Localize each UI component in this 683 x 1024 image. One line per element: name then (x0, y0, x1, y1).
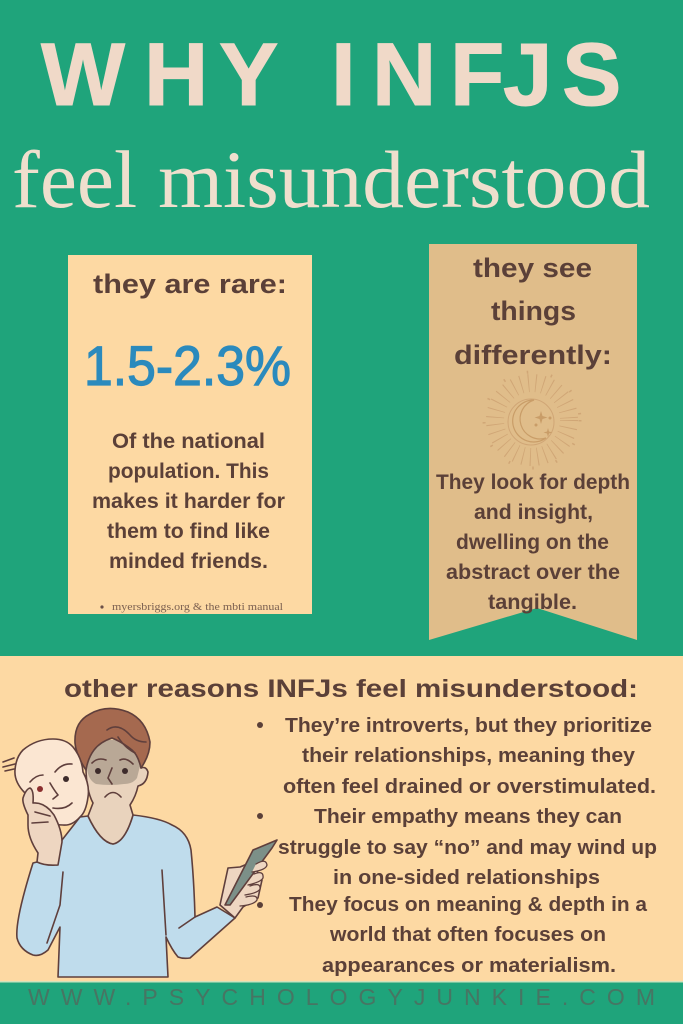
hand holding mask (23, 788, 62, 865)
text block: national population: population. This (108, 460, 269, 483)
title: WHY INFJS: Y (219, 24, 277, 124)
title: WHY INFJS: F (450, 24, 504, 124)
reason list: appearances or materialism. (322, 955, 616, 977)
reason list: They focus on meaning & depth in a (289, 894, 648, 916)
reason list: in one-sided relationships (333, 867, 600, 889)
illustration: man holding a smiling mask and phone (3, 708, 277, 977)
head and hair (75, 708, 150, 844)
phone and hand (220, 840, 277, 918)
source note: myersbriggs.org & the mbti manual (112, 602, 283, 613)
panel: other reasons (0, 656, 683, 982)
title: WHY INFJS: N (372, 24, 436, 124)
text block: national population: minded friends. (109, 550, 268, 573)
reason list: Their empathy means they can (314, 806, 622, 828)
title: WHY INFJS: S (562, 24, 621, 124)
text block: depth and insight: dwelling on the (456, 531, 609, 554)
heading: they see things differently: things (491, 296, 576, 326)
footer strip with website (0, 981, 683, 1024)
website address: WWW.PSYCHOLOGYJUNKIE.COM (28, 984, 655, 1010)
panel: they are rare (68, 255, 312, 614)
mask (3, 739, 88, 825)
heading: they see things differently (454, 253, 612, 370)
reason list (257, 715, 657, 977)
reason list: They’re introverts, but they prioritize (285, 715, 652, 737)
heading: they see things differently: they see (473, 253, 592, 283)
heading: they are rare: they are rare: (93, 269, 287, 299)
text block: national population: them to find like (107, 520, 270, 543)
heading: they see things differently: differently: (454, 340, 612, 370)
text block: national population: makes it harder for (92, 490, 285, 513)
text block: national population (92, 430, 285, 573)
shirt and arms (17, 815, 235, 977)
reason list: often feel drained or overstimulated. (283, 776, 656, 798)
panel: they see things differently ribbon (429, 244, 637, 640)
fingers (240, 861, 267, 906)
reason list: world that often focuses on (329, 924, 606, 946)
icon: moon and sun (484, 372, 580, 468)
subtitle: feel misunderstood: feel misunderstood (12, 134, 650, 225)
text block: national population: Of the national (112, 430, 265, 453)
text block: depth and insight: abstract over the (446, 561, 620, 584)
heading: other reasons INFJs feel misunderstood: other reasons INFJs feel misunderstood: (64, 675, 638, 703)
text block: depth and insight: tangible. (488, 591, 577, 614)
text block: depth and insight: They look for depth (436, 471, 630, 494)
reason list: struggle to say “no” and may wind up (278, 837, 657, 859)
title: WHY INFJS: J (503, 24, 552, 124)
text block: depth and insight: and insight, (474, 501, 593, 524)
reason list: their relationships, meaning they (302, 745, 636, 767)
title: WHY INFJS: I (331, 24, 356, 124)
text block: depth and insight (436, 471, 630, 614)
title: WHY INFJS: W (41, 24, 125, 124)
statistic: 1.5-2.3%: 1.5-2.3% (84, 334, 291, 397)
title: WHY INFJS: H (144, 24, 208, 124)
